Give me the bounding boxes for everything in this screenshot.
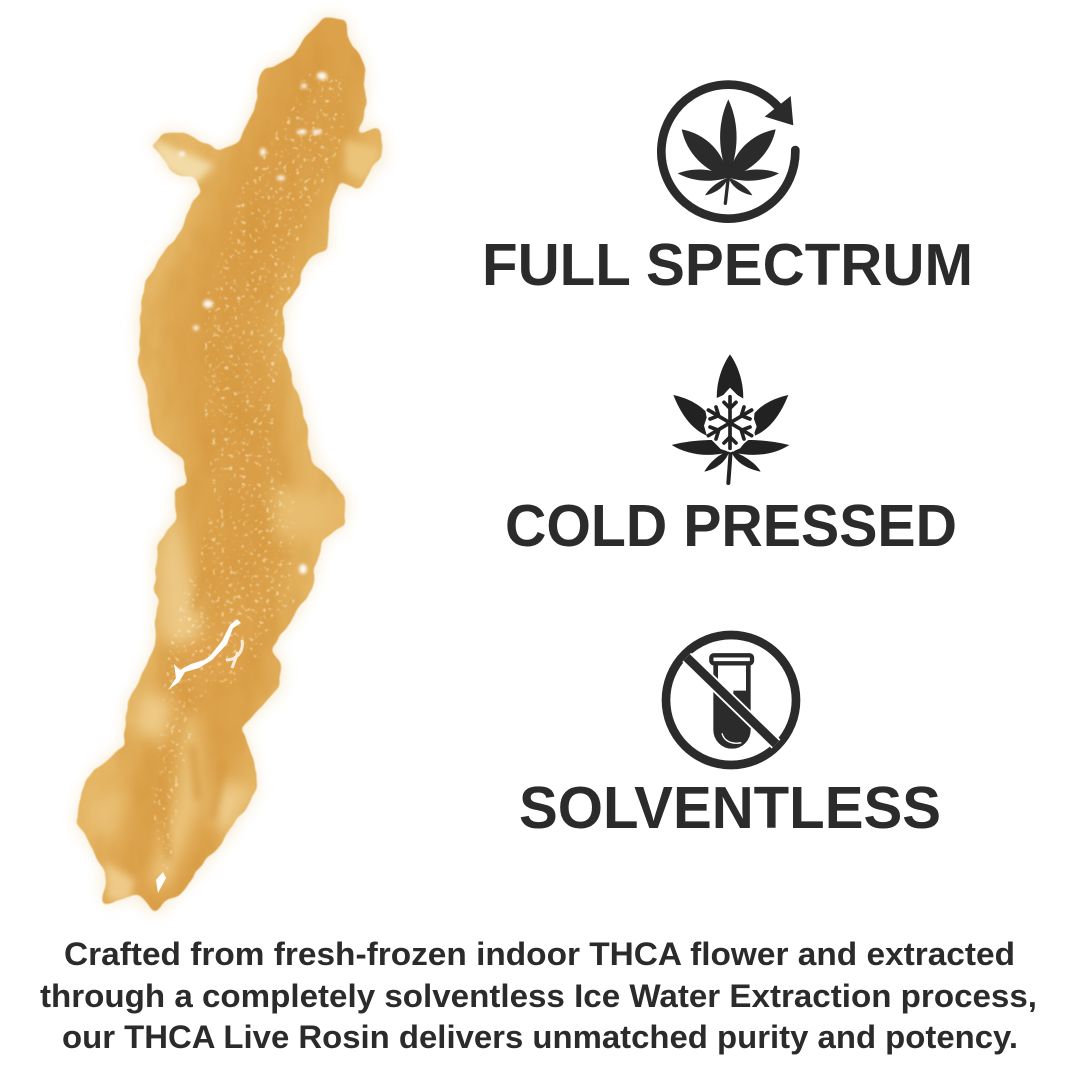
heading: cold pressed: COLD PRESSED bbox=[505, 493, 957, 559]
texture specks bbox=[150, 70, 345, 890]
feature: full spectrum bbox=[482, 85, 973, 298]
heading: solventless: SOLVENTLESS bbox=[519, 775, 941, 841]
description paragraph: through a completely solventless Ice Water Extraction process, bbox=[40, 978, 1037, 1014]
description paragraph bbox=[40, 936, 1037, 1055]
glossy highlights bbox=[156, 72, 327, 893]
rosin concentrate smear bbox=[70, 10, 391, 918]
description paragraph: Crafted from fresh-frozen indoor THCA flower and extracted bbox=[64, 936, 1015, 972]
feature: cold pressed bbox=[505, 354, 957, 559]
heading: full spectrum: FULL SPECTRUM bbox=[482, 232, 973, 298]
icon: cannabis leaf with snowflake bbox=[672, 354, 789, 483]
description paragraph: our THCA Live Rosin delivers unmatched purity and potency. bbox=[62, 1019, 1018, 1055]
feature: solventless bbox=[519, 635, 941, 841]
icon: crossed-out test tube bbox=[666, 635, 796, 765]
icon: cannabis leaf in circular arrow bbox=[661, 85, 795, 219]
